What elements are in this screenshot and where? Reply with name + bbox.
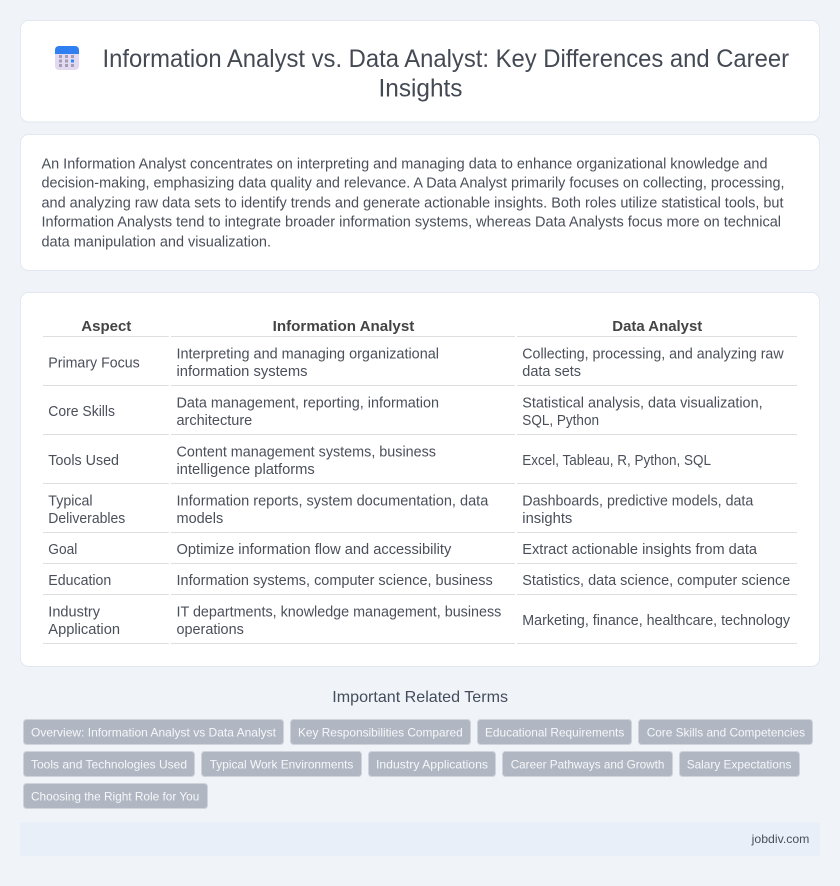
title: Information Analyst vs. Data Analyst: Key Differences and Career <box>102 45 789 73</box>
row: goal <box>48 542 757 558</box>
icon: calendar <box>55 46 79 70</box>
tag <box>24 720 284 744</box>
table header row: Information Analyst <box>273 319 414 335</box>
row: goal: Extract actionable insights from data <box>522 542 757 558</box>
title: Insights <box>378 74 462 102</box>
row: tools used: Tools Used <box>48 453 119 469</box>
related terms tags <box>24 720 812 808</box>
footer: jobdiv.com <box>751 832 809 846</box>
row: tools used: intelligence platforms <box>176 462 315 478</box>
tag: Overview: Information Analyst vs Data Analyst <box>31 725 277 739</box>
panel: summary paragraph <box>20 134 820 270</box>
tag <box>368 752 496 776</box>
row: education <box>48 573 790 589</box>
tag: Choosing the Right Role for You <box>31 789 199 803</box>
summary text: Information Analysts tend to integrate broader information systems, whereas Data Analysts focus more on technical <box>42 215 781 231</box>
tag: Typical Work Environments <box>210 757 353 771</box>
row: tools used: Content management systems, business <box>176 444 436 460</box>
row: typical deliverables: Deliverables <box>48 511 125 527</box>
footer <box>20 822 820 856</box>
summary text: data manipulation and visualization. <box>42 234 271 250</box>
summary text: decision-making, emphasizing data quality and relevance. A Data Analyst primarily focuses on collecting, processing, <box>42 176 784 192</box>
row: industry application: operations <box>176 622 244 638</box>
summary text: and analyzing raw data sets to identify trends and generate actionable insights. Both roles utilize statistical tools, but <box>42 195 784 211</box>
row: primary focus: Interpreting and managing organizational <box>176 346 439 362</box>
tag <box>290 720 470 744</box>
row: industry application: Marketing, finance, healthcare, technology <box>522 613 791 629</box>
table header row: Data Analyst <box>612 319 702 335</box>
tag: Tools and Technologies Used <box>31 757 187 771</box>
row: typical deliverables <box>48 493 753 527</box>
row: typical deliverables: Information reports, system documentation, data <box>176 493 488 509</box>
heading: important related terms: Important Related Terms <box>332 689 508 706</box>
tag: Industry Applications <box>376 757 488 771</box>
row: goal: Goal <box>48 542 77 558</box>
row: primary focus: data sets <box>522 364 581 380</box>
row: typical deliverables: models <box>176 511 223 527</box>
table header row: Aspect <box>81 319 131 335</box>
tag: Core Skills and Competencies <box>647 725 805 739</box>
row: primary focus: Primary Focus <box>48 355 140 371</box>
tag <box>478 720 632 744</box>
row: industry application: IT departments, knowledge management, business <box>176 604 501 620</box>
tag <box>638 720 812 744</box>
row: industry application: Industry <box>48 604 101 620</box>
tag <box>502 752 672 776</box>
panel: comparison table <box>20 292 820 666</box>
row: tools used <box>48 444 711 478</box>
row: core skills: Core Skills <box>48 404 115 420</box>
row: typical deliverables: insights <box>522 511 572 527</box>
row: typical deliverables: Dashboards, predictive models, data <box>522 493 753 509</box>
row: education: Education <box>48 573 111 589</box>
row: primary focus: information systems <box>176 364 308 380</box>
table header row <box>81 319 702 335</box>
row: primary focus <box>48 346 784 380</box>
row: education: Information systems, computer science, business <box>176 573 493 589</box>
row: core skills: SQL, Python <box>522 413 599 429</box>
tag <box>680 752 800 776</box>
row: typical deliverables: Typical <box>48 493 93 509</box>
tag <box>24 784 208 808</box>
panel: header <box>20 20 820 122</box>
tag: Key Responsibilities Compared <box>298 725 463 739</box>
row: core skills: architecture <box>176 413 252 429</box>
row: goal: Optimize information flow and accessibility <box>176 542 452 558</box>
tag: Career Pathways and Growth <box>511 757 664 771</box>
row: core skills: Statistical analysis, data visualization, <box>522 395 763 411</box>
title <box>102 45 789 102</box>
row: industry application: Application <box>48 622 120 638</box>
row: industry application <box>48 604 791 638</box>
row: core skills <box>48 395 763 429</box>
summary text <box>42 156 784 250</box>
tag: Salary Expectations <box>687 757 791 771</box>
summary text: An Information Analyst concentrates on interpreting and managing data to enhance organizational knowledge and <box>42 156 768 172</box>
tag <box>24 752 194 776</box>
row: core skills: Data management, reporting, information <box>176 395 439 411</box>
tag: Educational Requirements <box>485 725 624 739</box>
row: tools used: Excel, Tableau, R, Python, SQL <box>522 453 711 469</box>
row: education: Statistics, data science, computer science <box>522 573 790 589</box>
row: primary focus: Collecting, processing, and analyzing raw <box>522 346 784 362</box>
tag <box>202 752 362 776</box>
